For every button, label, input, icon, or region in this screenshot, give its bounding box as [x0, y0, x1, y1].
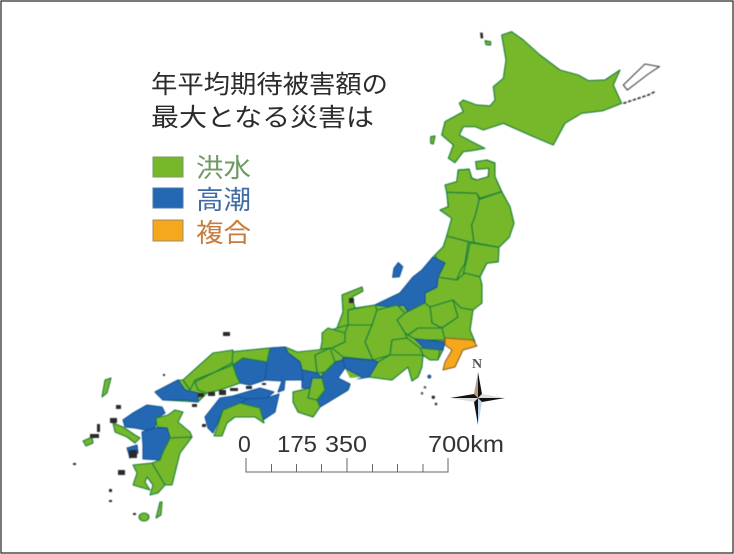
- Iwate: [472, 192, 514, 247]
- Nara: [308, 378, 325, 400]
- Kagoshima: [133, 463, 165, 495]
- Miyagi: [463, 243, 499, 277]
- scale labels: [238, 431, 504, 457]
- Honshu landmass: [155, 160, 514, 417]
- coastline islets: [73, 332, 266, 515]
- title: 年平均期待被害額の: [151, 71, 388, 99]
- Wakayama: [293, 388, 320, 417]
- Goto islands: [83, 437, 93, 446]
- Kagawa: [233, 388, 274, 399]
- Niigata: [375, 257, 445, 312]
- Nagano: [365, 305, 407, 360]
- Okayama: [233, 358, 267, 385]
- scale labels: 350: [325, 431, 367, 457]
- Shizuoka: [369, 355, 423, 381]
- compass rose: [450, 357, 505, 425]
- Central Honshu prefectures: [285, 257, 482, 417]
- Tokushima: [240, 394, 279, 420]
- scale bar: [238, 431, 504, 472]
- legend item: flood: 洪水: [196, 153, 251, 183]
- Gifu: [332, 325, 373, 360]
- Tottori: [230, 348, 270, 365]
- Ise Bay: [338, 368, 362, 383]
- Hiroshima: [195, 365, 240, 393]
- Yamagata: [435, 236, 468, 280]
- legend item: compound: 複合: [196, 218, 251, 248]
- Kyoto: [285, 347, 330, 373]
- Mie: [317, 360, 350, 407]
- Toyama: [348, 305, 377, 325]
- Yamanashi: [390, 338, 423, 355]
- legend item: storm surge: 高潮: [196, 185, 251, 215]
- map of Japan: [73, 32, 659, 521]
- legend: [153, 153, 251, 248]
- Tokyo: [415, 339, 445, 350]
- Kochi: [214, 403, 264, 436]
- Saga and Nagasaki: [113, 423, 140, 443]
- Tsushima: [102, 378, 111, 397]
- Fukushima: [425, 273, 482, 310]
- scale labels: 0: [238, 431, 251, 457]
- Akita: [440, 192, 479, 243]
- Miyazaki: [152, 437, 192, 485]
- Kanagawa: [420, 348, 440, 360]
- Shimabara: [127, 445, 138, 458]
- Osaka: [302, 370, 322, 388]
- title: [151, 71, 388, 132]
- Hokkaido: [431, 32, 659, 163]
- Kyushu prefectures: [83, 378, 192, 521]
- Ishikawa: [337, 287, 363, 328]
- Fukuoka: [123, 405, 165, 430]
- Sado island: [393, 263, 403, 277]
- Saitama: [408, 328, 445, 340]
- Shikoku prefectures: [205, 388, 279, 436]
- scale labels: 700km: [428, 431, 504, 457]
- Shimane: [183, 350, 233, 390]
- scale labels: 175: [277, 431, 317, 457]
- Ehime: [205, 396, 247, 433]
- Tanegashima: [156, 502, 162, 518]
- Tochigi: [430, 300, 458, 328]
- Ibaraki: [440, 300, 475, 342]
- Tohoku prefectures: [393, 160, 514, 405]
- Gunma: [397, 303, 442, 335]
- Izu islands: [421, 375, 437, 405]
- north label: N: [472, 357, 482, 372]
- Hyogo: [265, 347, 303, 392]
- title: 最大となる災害は: [151, 104, 374, 132]
- Chiba: [443, 338, 477, 370]
- Yamaguchi: [155, 380, 198, 402]
- Western Honshu prefectures: [155, 347, 303, 402]
- Shiga: [315, 348, 335, 373]
- Aichi: [341, 358, 378, 380]
- Aomori: [445, 160, 502, 198]
- Noto speck: [349, 298, 354, 303]
- Oita: [156, 410, 192, 438]
- Fukui: [320, 328, 345, 352]
- Yakushima: [139, 513, 149, 521]
- Kumamoto: [142, 428, 170, 460]
